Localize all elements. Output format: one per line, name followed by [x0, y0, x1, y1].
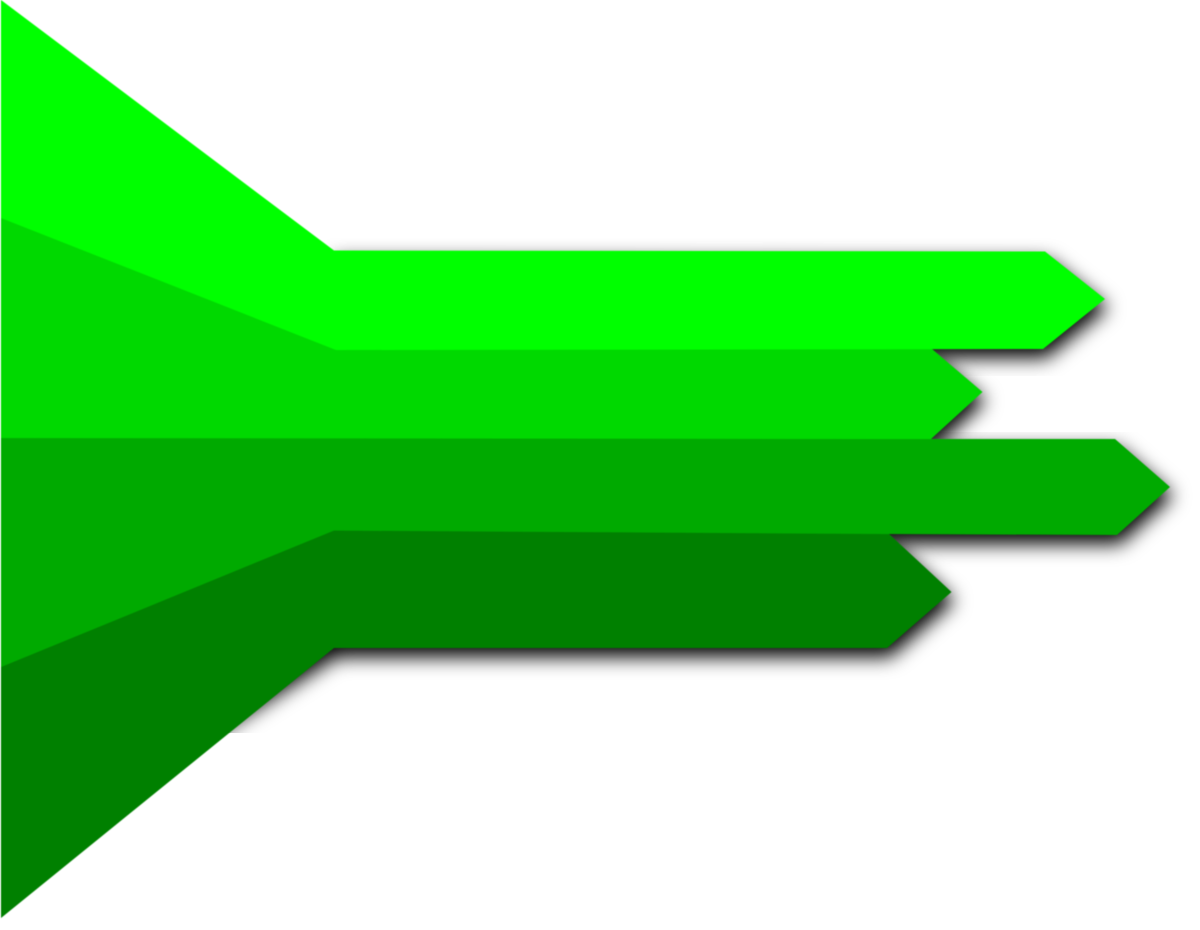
arrow 3: medium green [1, 430, 1170, 667]
arrow 4: dark green [1, 525, 952, 918]
arrow shadows [200, 260, 1173, 745]
arrow 2: bright medium green [1, 210, 982, 439]
arrow 1: brightest green [1, 0, 1105, 350]
